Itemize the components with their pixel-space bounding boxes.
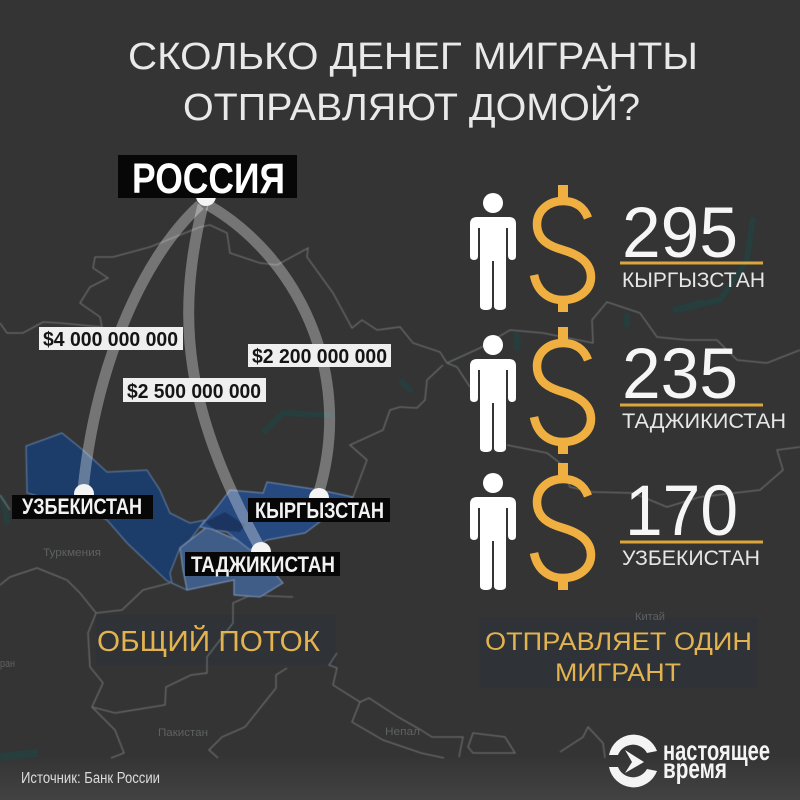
west: [0, 495, 10, 510]
map: country names: ран: [0, 658, 15, 670]
label: Uzbekistan: УЗБЕКИСТАН: [22, 494, 142, 519]
map: country names: Непал: [385, 726, 420, 738]
arc: Russia to Uzbekistan: [83, 205, 200, 490]
divider: [620, 404, 763, 406]
row: Uzbekistan: [470, 463, 763, 590]
logo: [609, 735, 770, 787]
country: КЫРГЫЗСТАН: [622, 269, 765, 292]
row: Tajikistan: [470, 327, 786, 454]
heading: total flow: ОБЩИЙ ПОТОК: [97, 624, 320, 658]
map: highlighted countries: [26, 433, 353, 597]
map: country names: Туркмения: [43, 547, 101, 559]
label: Tajikistan: ТАДЖИКИСТАН: [191, 552, 335, 577]
icon: dollar: [534, 463, 591, 590]
icon: person: [470, 193, 516, 310]
icon: person: [470, 473, 516, 590]
icon: dollar: [534, 185, 591, 312]
logo text: время: [663, 753, 727, 784]
map: country names: Пакистан: [158, 727, 208, 739]
label: Tajikistan flow: $2 500 000 000: [127, 381, 261, 403]
label: Russia: РОССИЯ: [132, 155, 285, 203]
region: Fergana: [205, 512, 245, 532]
north border: [0, 225, 800, 363]
value: 235: [622, 335, 738, 414]
divider: [620, 540, 763, 544]
source: Источник: Банк России: [21, 770, 160, 787]
title: [128, 36, 698, 129]
row: Kyrgyzstan: [470, 185, 765, 312]
label: Kyrgyzstan: КЫРГЫЗСТАН: [255, 498, 384, 523]
flow arcs: [83, 205, 330, 548]
divider: [620, 262, 763, 264]
map: country borders and water: [0, 217, 800, 758]
arc: Russia to Kyrgyzstan: [208, 205, 330, 492]
title: СКОЛЬКО ДЕНЕГ МИГРАНТЫ: [128, 36, 698, 78]
icon: dollar: [534, 327, 591, 454]
label: Kyrgyzstan flow: $2 200 000 000: [252, 346, 387, 368]
country: ТАДЖИКИСТАН: [622, 410, 786, 433]
country: Kyrgyzstan: [200, 482, 353, 550]
heading: sent by one migrant: [485, 628, 752, 687]
heading: sent by one migrant: МИГРАНТ: [555, 659, 681, 687]
icon: person: [470, 335, 516, 452]
country: Uzbekistan: [26, 433, 205, 590]
country: Tajikistan: [180, 527, 283, 597]
title: ОТПРАВЛЯЮТ ДОМОЙ?: [183, 84, 640, 129]
map: country names: Китай: [635, 611, 665, 623]
value: 295: [622, 194, 738, 273]
china border: [507, 445, 800, 507]
heading: sent by one migrant: ОТПРАВЛЯЕТ ОДИН: [485, 628, 752, 656]
logo text: [663, 735, 770, 784]
value: 170: [625, 472, 738, 551]
map: country names: [0, 547, 665, 739]
label: Uzbekistan flow: $4 000 000 000: [43, 329, 178, 351]
arc: Russia to Tajikistan: [189, 205, 260, 548]
icon: logo ring: [609, 735, 657, 787]
endpoint dots: [74, 186, 329, 562]
country: УЗБЕКИСТАН: [622, 547, 760, 570]
